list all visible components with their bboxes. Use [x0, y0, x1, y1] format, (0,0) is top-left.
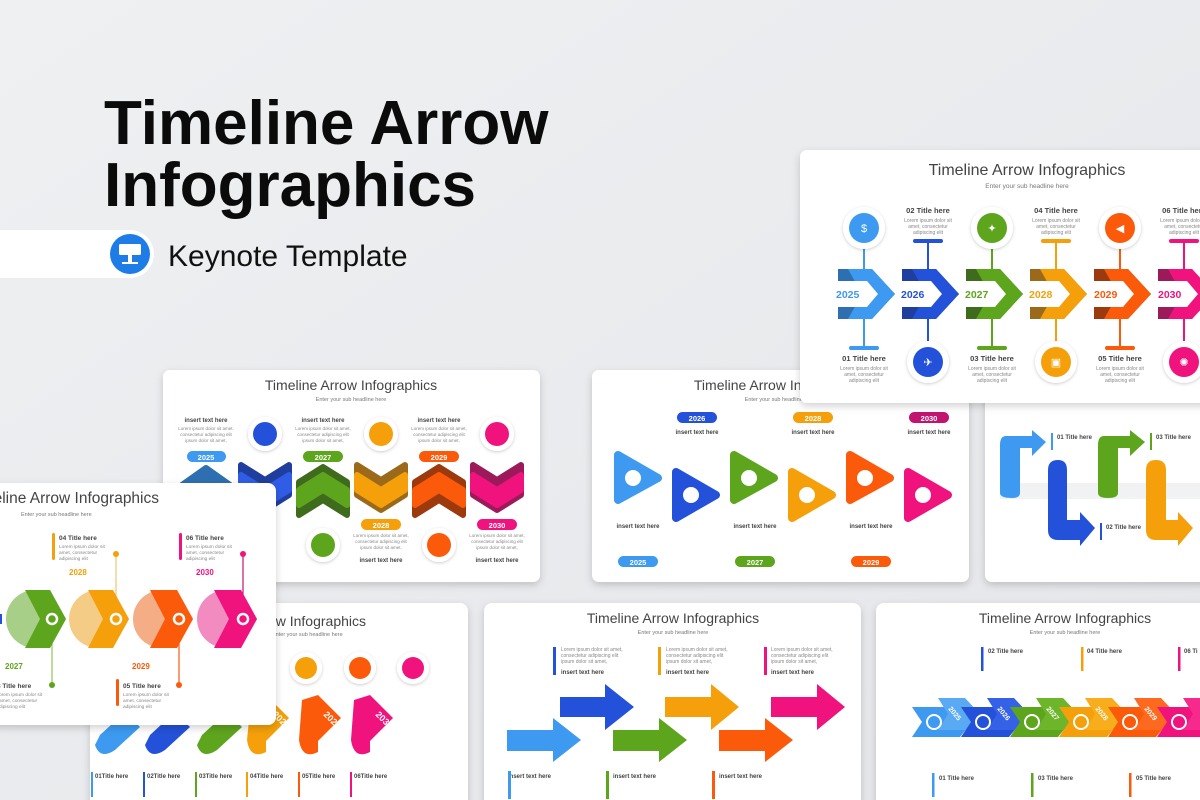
- card: bottom middle slide (speed arrows): Lorem ipsum dolor sit amet,: [666, 647, 728, 653]
- icon circles: $: [861, 223, 867, 235]
- card: bottom middle slide (speed arrows): insert text here: [508, 774, 552, 780]
- card: bottom right slide (chevron row): 2028: [1093, 706, 1109, 722]
- card: middle left slide (double chevrons): insert text here: [184, 418, 228, 424]
- card: bottom middle slide (speed arrows): insert text here: [719, 774, 763, 780]
- year band: [818, 281, 1198, 307]
- year band: 2028: [1029, 289, 1053, 301]
- card: middle left slide (double chevrons): 2025: [198, 453, 214, 462]
- step texts: Lorem ipsum dolor sit: [840, 366, 889, 372]
- card: middle center slide (play triangles): insert text here: [675, 430, 719, 436]
- card: bottom middle slide (speed arrows): insert text here: [771, 670, 815, 676]
- card: middle left slide (double chevrons): Lorem ipsum dolor sit amet,: [295, 426, 351, 431]
- step texts: Lorem ipsum dolor sit: [1096, 366, 1145, 372]
- card: bottom right slide (chevron row): 05 Title here: [1136, 776, 1172, 782]
- card: bottom right slide (chevron row): 03 Title here: [1038, 776, 1074, 782]
- icon circles: ◀: [1116, 223, 1125, 235]
- card: left front slide (half-round arrows): amet, consectetur: [186, 550, 225, 556]
- card: middle center slide (play triangles): 2027: [747, 558, 763, 567]
- card: middle left slide (double chevrons): Enter your sub headline here: [316, 397, 386, 403]
- card: bottom right slide (chevron row): 2025: [946, 706, 962, 722]
- step texts: adipiscing elit: [1041, 230, 1072, 236]
- card: bottom middle slide (speed arrows): insert text here: [613, 774, 657, 780]
- card: middle left slide (double chevrons): 2029: [431, 453, 447, 462]
- year band: 2025: [836, 289, 860, 301]
- main title: [104, 89, 549, 220]
- card: bottom middle slide (speed arrows): insert text here: [561, 670, 605, 676]
- step texts: 04 Title here: [1034, 206, 1078, 215]
- step texts: amet, consectetur: [972, 372, 1012, 378]
- card: left front slide (half-round arrows): amet, consectetur: [0, 698, 38, 704]
- step texts: adipiscing elit: [977, 378, 1008, 384]
- card: left front slide (half-round arrows): adipiscing elit: [186, 556, 215, 562]
- card: top right slide (main chevron timeline): Enter your sub headline here: [985, 183, 1069, 190]
- year band: 2026: [901, 289, 925, 301]
- card: bottom right slide (chevron row): 2029: [1142, 706, 1158, 722]
- connector lines: [864, 243, 1184, 347]
- card: middle left slide (double chevrons): insert text here: [475, 558, 519, 564]
- card: bottom left slide (chevron hearts): [90, 603, 468, 800]
- card: bottom middle slide (speed arrows): consectetur adipiscing elit: [771, 653, 829, 659]
- card: middle center slide (play triangles): insert text here: [616, 524, 660, 530]
- card: left front slide (half-round arrows): amet, consectetur: [59, 550, 98, 556]
- card: middle right slide (path arrows): [985, 370, 1200, 582]
- step texts: 02 Title here: [906, 206, 950, 215]
- card: middle center slide (play triangles): 2030: [921, 414, 937, 423]
- bars: [849, 239, 1199, 350]
- card: bottom middle slide (speed arrows): consectetur adipiscing elit: [561, 653, 619, 659]
- card: left front slide (half-round arrows): 2030: [196, 568, 214, 577]
- card: bottom right slide (chevron row): 01 Title here: [939, 776, 975, 782]
- card: bottom left slide (chevron hearts): 06Title here: [354, 774, 388, 780]
- card: left front slide (half-round arrows): Enter your sub headline here: [21, 512, 92, 518]
- card: left front slide (half-round arrows): 06 Title here: [186, 535, 224, 542]
- card: middle center slide (play triangles): insert text here: [733, 524, 777, 530]
- card: bottom middle slide (speed arrows): consectetur adipiscing elit: [666, 653, 724, 659]
- step texts: amet, consectetur: [908, 224, 948, 230]
- slide title: Timeline Arrow Infographics: [929, 162, 1125, 179]
- card: middle center slide (play triangles): 2026: [689, 414, 705, 423]
- step texts: amet, consectetur: [1100, 372, 1140, 378]
- icon circles: ✺: [1179, 357, 1189, 369]
- card: middle center slide (play triangles): 2025: [630, 558, 646, 567]
- card: middle left slide (double chevrons): insert text here: [359, 558, 403, 564]
- card: middle right slide (path arrows): 03 Title here: [1156, 435, 1192, 441]
- card: middle left slide (double chevrons): [163, 370, 540, 582]
- step texts: adipiscing elit: [1169, 230, 1200, 236]
- card: bottom right slide (chevron row): Timeline Arrow Infographics: [979, 610, 1151, 626]
- main title: Timeline Arrow: [104, 89, 549, 158]
- card: middle left slide (double chevrons): Lorem ipsum dolor sit amet,: [353, 533, 409, 538]
- card: bottom left slide (chevron hearts): 2029: [322, 709, 343, 731]
- card: bottom right slide (chevron row): 2026: [995, 706, 1011, 722]
- year band: 2029: [1094, 289, 1118, 301]
- card: middle left slide (double chevrons): insert text here: [301, 418, 345, 424]
- card: middle left slide (double chevrons): ipsum dolor sit amet,: [302, 438, 344, 443]
- card: middle center slide (play triangles): Enter your sub headline here: [745, 397, 815, 403]
- year band: 2030: [1158, 289, 1182, 301]
- card: bottom middle slide (speed arrows): ipsum dolor sit amet,: [666, 659, 712, 665]
- card: bottom left slide (chevron hearts): 2028: [271, 709, 292, 731]
- card: left front slide (half-round arrows): 04 Title here: [59, 535, 97, 542]
- card: bottom right slide (chevron row): 02 Title here: [988, 649, 1024, 655]
- card: middle left slide (double chevrons): consectetur adipiscing elit: [297, 432, 350, 437]
- card: middle left slide (double chevrons): ipsum dolor sit amet,: [360, 545, 402, 550]
- card: middle center slide (play triangles): 2029: [863, 558, 879, 567]
- card: bottom middle slide (speed arrows): ipsum dolor sit amet,: [771, 659, 817, 665]
- card: middle center slide (play triangles): [592, 370, 969, 582]
- icon circles: ▣: [1051, 357, 1061, 369]
- card: left front slide (half-round arrows): amet, consectetur: [123, 698, 162, 704]
- card: middle left slide (double chevrons): ipsum dolor sit amet,: [418, 438, 460, 443]
- card: middle center slide (play triangles): 2028: [805, 414, 821, 423]
- card: bottom right slide (chevron row): 04 Title here: [1087, 649, 1123, 655]
- card: bottom left slide (chevron hearts): 02Title here: [147, 774, 181, 780]
- card: left front slide (half-round arrows): adipiscing elit: [123, 704, 152, 710]
- step texts: adipiscing elit: [913, 230, 944, 236]
- card: bottom right slide (chevron row): Enter your sub headline here: [1030, 630, 1100, 636]
- card: bottom left slide (chevron hearts): Timeline Arrow Infographics: [194, 613, 366, 629]
- card: middle left slide (double chevrons): 2028: [373, 521, 389, 530]
- card: left front slide (half-round arrows): 2027: [5, 662, 23, 671]
- year band: 2027: [965, 289, 989, 301]
- card: middle left slide (double chevrons): consectetur adipiscing elit: [471, 539, 524, 544]
- subtitle with keynote icon: [0, 230, 408, 278]
- step texts: 05 Title here: [1098, 354, 1142, 363]
- card: bottom middle slide (speed arrows): [484, 603, 861, 800]
- step texts: amet, consectetur: [844, 372, 884, 378]
- card: middle left slide (double chevrons): Timeline Arrow Infographics: [265, 377, 437, 393]
- card: bottom left slide (chevron hearts): Enter your sub headline here: [272, 632, 343, 638]
- card: middle right slide (path arrows): 02 Title here: [1106, 525, 1142, 531]
- icon circles: ✦: [987, 223, 997, 235]
- card: middle left slide (double chevrons): 2027: [315, 453, 331, 462]
- card: bottom right slide (chevron row): 06 Ti: [1184, 649, 1198, 655]
- step texts: 01 Title here: [842, 354, 886, 363]
- card: bottom right slide (chevron row): [876, 603, 1200, 800]
- step texts: 03 Title here: [970, 354, 1014, 363]
- card: left front slide (half-round arrows): orem ipsum dolor sit: [0, 692, 43, 698]
- card: middle left slide (double chevrons): Lorem ipsum dolor sit amet,: [469, 533, 525, 538]
- step texts: Lorem ipsum dolor sit: [968, 366, 1017, 372]
- card: middle center slide (play triangles): Timeline Arrow Infographics: [694, 377, 866, 393]
- card: left front slide (half-round arrows): Lorem ipsum dolor sit: [59, 544, 106, 550]
- card: left front slide (half-round arrows): Lorem ipsum dolor sit: [123, 692, 170, 698]
- card: bottom middle slide (speed arrows): Lorem ipsum dolor sit amet,: [771, 647, 833, 653]
- step texts: amet, consectetur: [1036, 224, 1076, 230]
- card: middle left slide (double chevrons): ipsum dolor sit amet,: [476, 545, 518, 550]
- card: bottom middle slide (speed arrows): Lorem ipsum dolor sit amet,: [561, 647, 623, 653]
- card: middle right slide (path arrows): 01 Title here: [1057, 435, 1093, 441]
- card: middle left slide (double chevrons): Lorem ipsum dolor sit amet,: [178, 426, 234, 431]
- step texts: Lorem ipsum dolor sit: [1032, 218, 1081, 224]
- card: middle left slide (double chevrons): consectetur adipiscing elit: [180, 432, 233, 437]
- step texts: adipiscing elit: [849, 378, 880, 384]
- card: middle left slide (double chevrons): Lorem ipsum dolor sit amet,: [411, 426, 467, 431]
- card: bottom middle slide (speed arrows): insert text here: [666, 670, 710, 676]
- card: bottom left slide (chevron hearts): 03Title here: [199, 774, 233, 780]
- card: bottom left slide (chevron hearts): 01Title here: [95, 774, 129, 780]
- step texts: adipiscing elit: [1105, 378, 1136, 384]
- step texts: Lorem ipsum dolor sit: [904, 218, 953, 224]
- icon circles: ✈: [923, 357, 933, 369]
- card: left front slide (half-round arrows): adipiscing elit: [59, 556, 88, 562]
- card: middle center slide (play triangles): insert text here: [907, 430, 951, 436]
- card: bottom left slide (chevron hearts): 2030: [374, 709, 395, 731]
- card: middle left slide (double chevrons): consectetur adipiscing elit: [413, 432, 466, 437]
- icon circles: [843, 207, 1200, 383]
- card: bottom middle slide (speed arrows): Enter your sub headline here: [638, 630, 708, 636]
- card: bottom right slide (chevron row): 2027: [1044, 706, 1060, 722]
- card: middle center slide (play triangles): insert text here: [849, 524, 893, 530]
- main title: Infographics: [104, 151, 476, 220]
- card: middle left slide (double chevrons): 2030: [489, 521, 505, 530]
- card: top right slide (main chevron timeline): [800, 150, 1200, 403]
- card: left front slide (half-round arrows): 2029: [132, 662, 150, 671]
- card: middle center slide (play triangles): insert text here: [791, 430, 835, 436]
- card: left front slide (half-round arrows): Lorem ipsum dolor sit: [186, 544, 233, 550]
- card: bottom middle slide (speed arrows): ipsum dolor sit amet,: [561, 659, 607, 665]
- card: bottom left slide (chevron hearts): 05Title here: [302, 774, 336, 780]
- card: bottom middle slide (speed arrows): Timeline Arrow Infographics: [587, 610, 759, 626]
- card: bottom left slide (chevron hearts): 04Title here: [250, 774, 284, 780]
- card: left front slide (half-round arrows): 05 Title here: [123, 683, 161, 690]
- subtitle with keynote icon: Keynote Template: [168, 240, 408, 273]
- card: middle left slide (double chevrons): ipsum dolor sit amet,: [185, 438, 227, 443]
- card: left front slide (half-round arrows): 2028: [69, 568, 87, 577]
- card: middle left slide (double chevrons): insert text here: [417, 418, 461, 424]
- card: middle left slide (double chevrons): consectetur adipiscing elit: [355, 539, 408, 544]
- card: left front slide (half-round arrows): [0, 483, 276, 725]
- step texts: [840, 206, 1200, 384]
